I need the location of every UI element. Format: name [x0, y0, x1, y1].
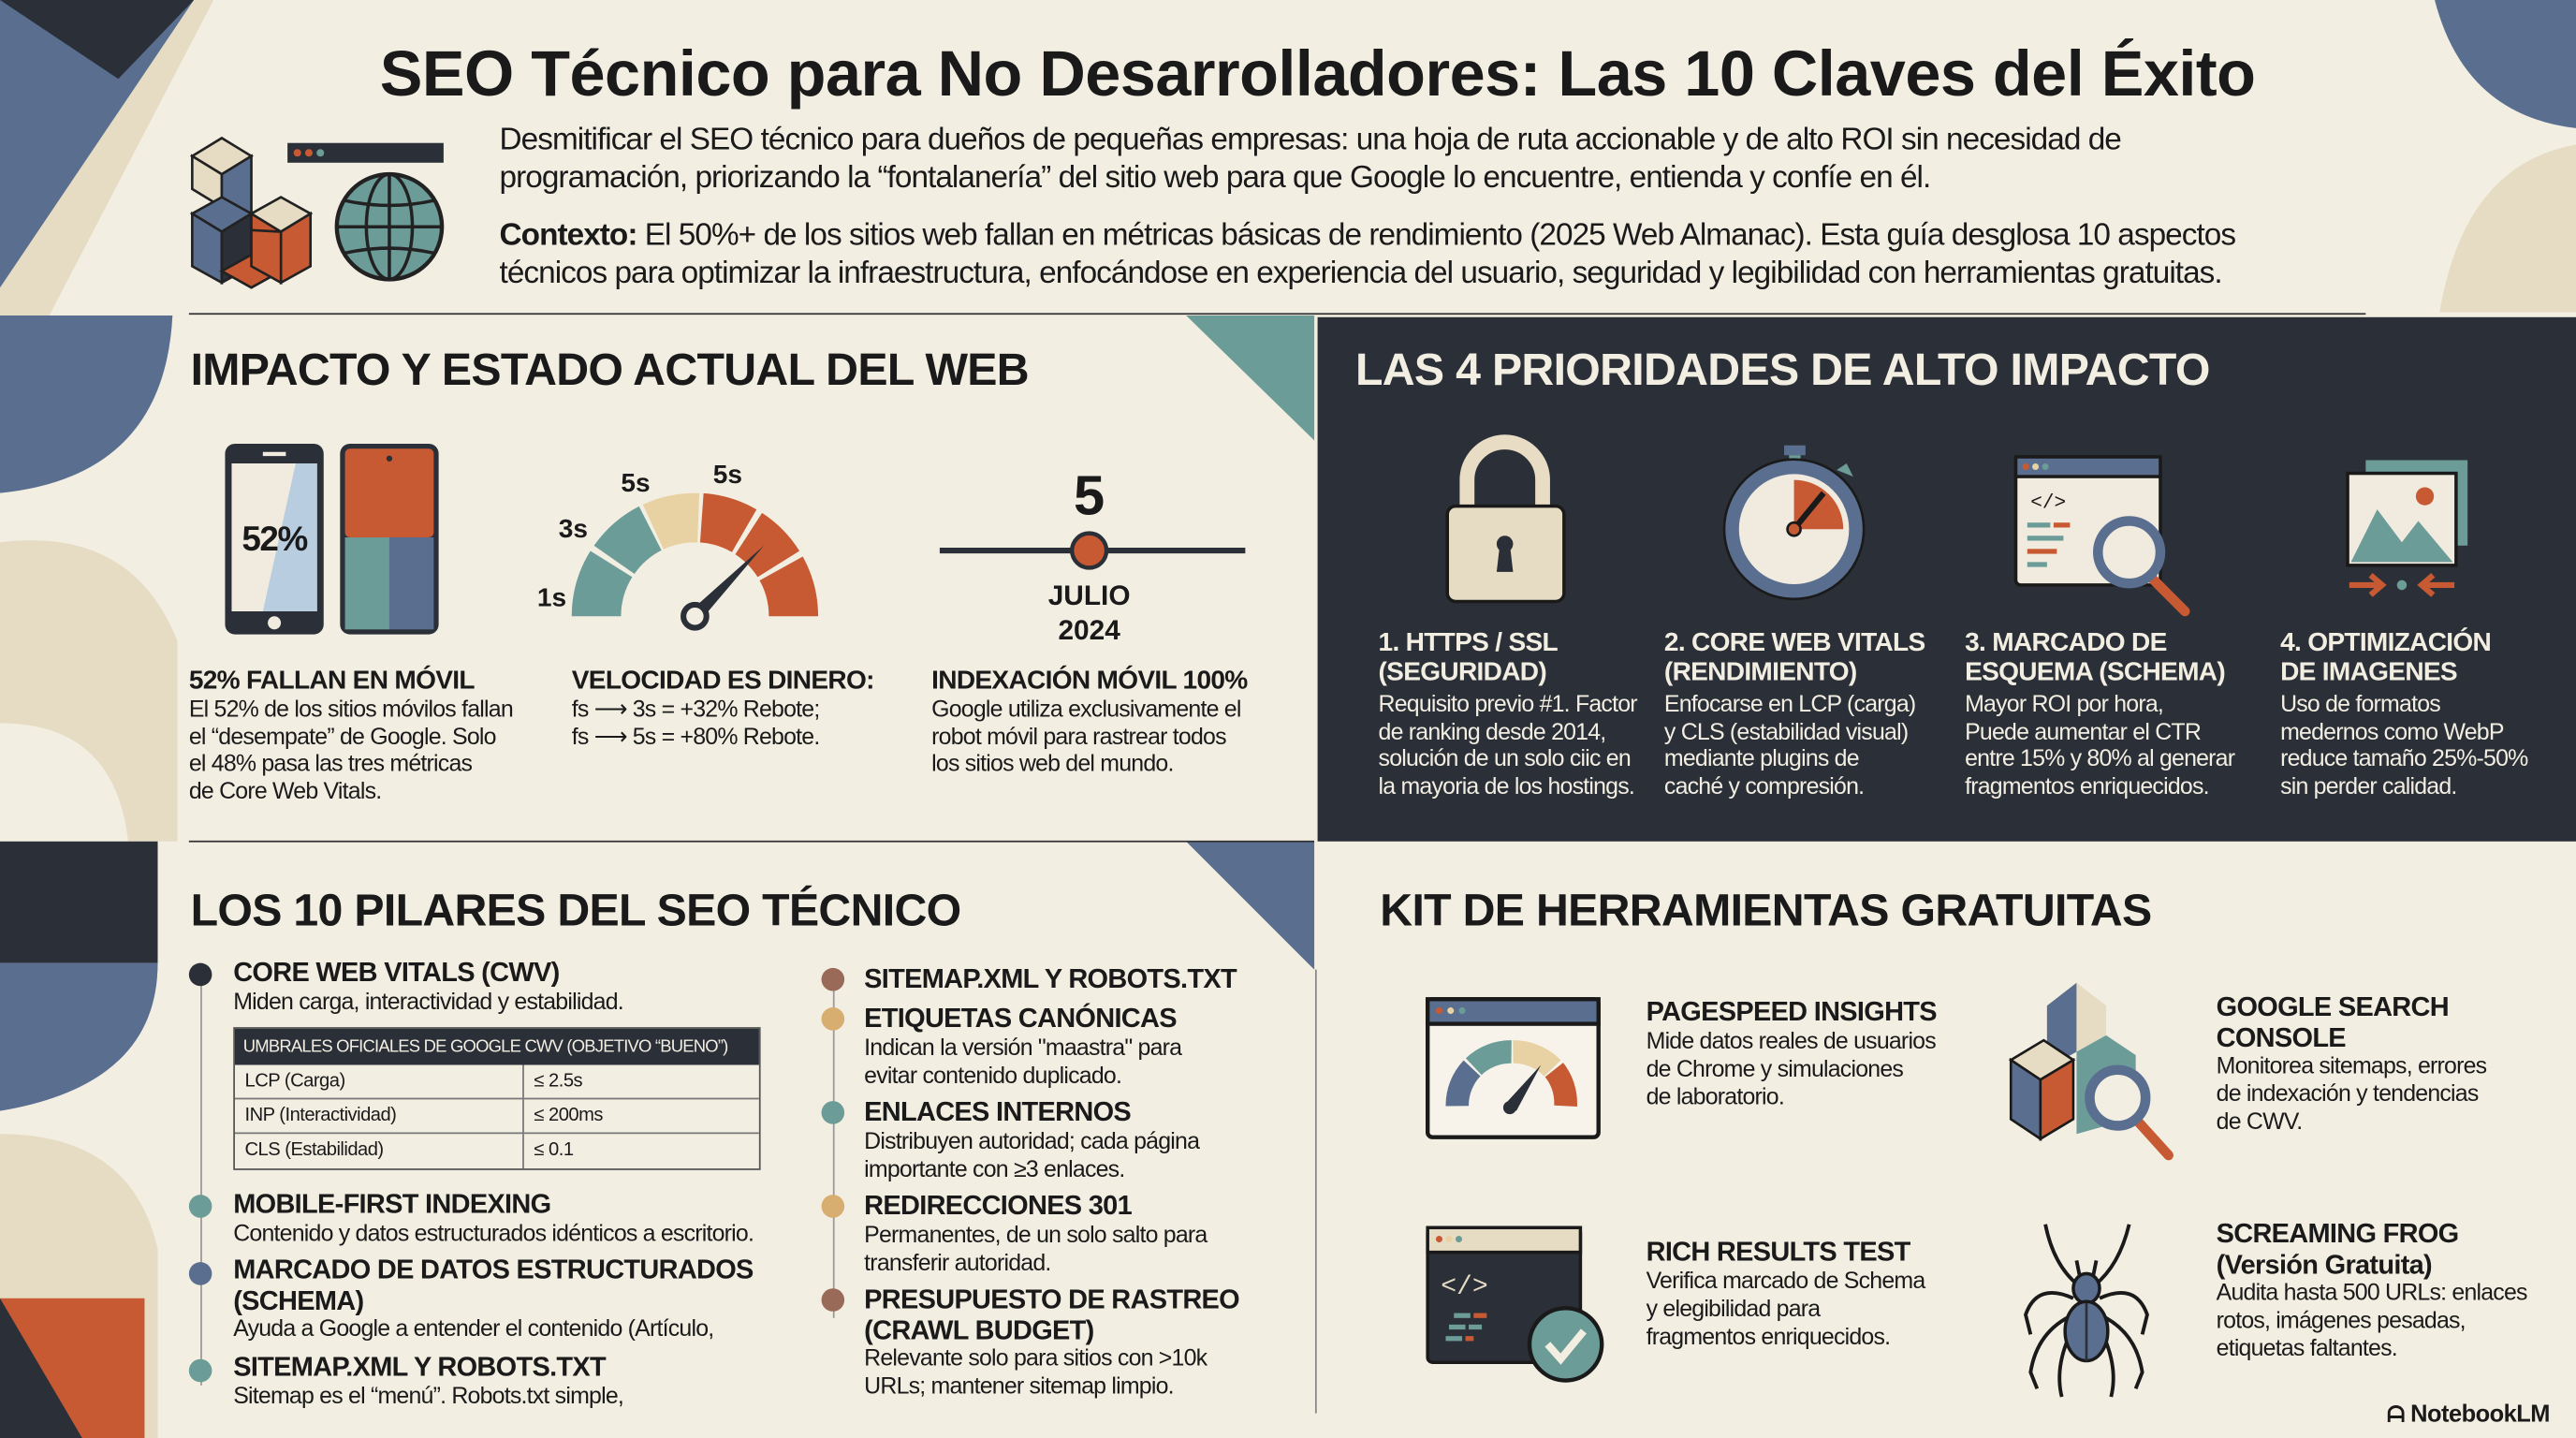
- text block: rich results: [1646, 1238, 1926, 1350]
- timeline: left column: MOBILE-FIRST INDEXING: [233, 1190, 550, 1220]
- timeline: right column: PRESUPUESTO DE RASTREO: [864, 1285, 1239, 1314]
- icon: cubes and globe: [189, 137, 444, 289]
- icon: phones: [225, 444, 439, 635]
- text block: schema: Mayor ROI por hora,: [1965, 692, 2163, 718]
- text block: schema: ESQUEMA (SCHEMA): [1965, 659, 2225, 687]
- text block: https: la mayoria de los hostings.: [1379, 773, 1634, 800]
- timeline: right column: evitar contenido duplicado.: [864, 1063, 1121, 1089]
- text block: imagenes: 4. OPTIMIZACIÓN: [2280, 629, 2491, 657]
- heading: pilares: LOS 10 PILARES DEL SEO TÉCNICO: [191, 884, 960, 935]
- text block: cwv: (RENDIMIENTO): [1664, 659, 1857, 687]
- text block: search console: de indexación y tendencias: [2217, 1081, 2479, 1108]
- chart: timeline julio 2024: 2024: [1058, 615, 1120, 646]
- timeline: left column: Contenido y datos estructurados idénticos a escritorio.: [233, 1220, 754, 1246]
- text block: velocidad: fs ⟶ 5s = +80% Rebote.: [572, 724, 819, 751]
- text block: screaming frog: [2217, 1220, 2527, 1362]
- timeline: left column: Ayuda a Google a entender el contenido (Artículo,: [233, 1316, 713, 1343]
- text block: screaming frog: (Versión Gratuita): [2217, 1250, 2432, 1280]
- timeline: left column: (SCHEMA): [233, 1286, 363, 1315]
- heading: prioridades: LAS 4 PRIORIDADES DE ALTO IMPACTO: [1355, 344, 2210, 394]
- text block: schema: fragmentos enriquecidos.: [1965, 773, 2209, 800]
- timeline: right column: Relevante solo para sitios con >10k: [864, 1346, 1207, 1372]
- subtitle: Desmitificar el SEO técnico para dueños de pequeñas empresas: una hoja de ruta accionable y de alto ROI sin necesidad de: [500, 124, 2121, 158]
- icon: phones: 52%: [242, 520, 308, 558]
- text block: 52% fallan: el 48% pasa las tres métricas: [189, 752, 472, 778]
- text block: imagenes: reduce tamaño 25%-50%: [2280, 746, 2527, 772]
- text block: https: de ranking desde 2014,: [1379, 719, 1605, 745]
- text block: rich results: RICH RESULTS TEST: [1647, 1238, 1910, 1267]
- text block: imagenes: medernos como WebP: [2280, 719, 2504, 745]
- text block: imagenes: DE IMAGENES: [2280, 659, 2457, 687]
- context paragraph: [500, 218, 2235, 291]
- timeline: left column: Miden carga, interactividad y estabilidad.: [233, 989, 623, 1015]
- text block: rich results: Verifica marcado de Schema: [1647, 1268, 1925, 1294]
- text block: 52% fallan: el “desempate” de Google. Solo: [189, 724, 496, 751]
- text block: pagespeed: PAGESPEED INSIGHTS: [1647, 998, 1937, 1027]
- text block: https: solución de un solo ciic en: [1379, 746, 1631, 772]
- table: cwv thresholds: ≤ 0.1: [534, 1140, 574, 1160]
- text block: cwv: caché y compresión.: [1664, 773, 1864, 800]
- icons: tools: </>: [1441, 1272, 1488, 1302]
- text block: schema: Puede aumentar el CTR: [1965, 719, 2201, 745]
- text block: pagespeed: Mide datos reales de usuarios: [1647, 1028, 1936, 1054]
- timeline: right column: ETIQUETAS CANÓNICAS: [864, 1005, 1177, 1034]
- timeline: right column: Distribuyen autoridad; cada página: [864, 1128, 1199, 1154]
- heading: impacto: IMPACTO Y ESTADO ACTUAL DEL WEB: [191, 344, 1029, 394]
- chart: speed gauge: [537, 461, 818, 631]
- timeline: right column: ENLACES INTERNOS: [864, 1098, 1131, 1127]
- text block: imagenes: Uso de formatos: [2280, 692, 2440, 718]
- text block: pagespeed: [1647, 998, 1937, 1110]
- icons: priorities: </>: [2030, 492, 2066, 514]
- text block: screaming frog: SCREAMING FROG: [2217, 1220, 2458, 1249]
- chart: speed gauge: 1s: [537, 583, 566, 612]
- table: cwv thresholds: LCP (Carga): [245, 1072, 345, 1092]
- text block: velocidad: [572, 668, 874, 751]
- text block: velocidad: fs ⟶ 3s = +32% Rebote;: [572, 697, 819, 723]
- timeline: left column: [189, 958, 761, 1409]
- chart: speed gauge: 5s: [713, 461, 742, 489]
- text block: screaming frog: Audita hasta 500 URLs: enlaces: [2217, 1280, 2527, 1307]
- text block: indexación: Google utiliza exclusivamente el: [931, 697, 1241, 723]
- text block: https: (SEGURIDAD): [1379, 659, 1546, 687]
- table: cwv thresholds: UMBRALES OFICIALES DE GOOGLE CWV (OBJETIVO “BUENO”): [243, 1037, 728, 1057]
- text block: search console: Monitorea sitemaps, errores: [2217, 1053, 2486, 1079]
- timeline: right column: Indican la versión "maastra" para: [864, 1034, 1181, 1061]
- text block: imagenes: [2280, 627, 2527, 800]
- title: SEO Técnico para No Desarrolladores: Las 10 Claves del Éxito: [380, 39, 2255, 110]
- table: cwv thresholds: [233, 1027, 761, 1170]
- text block: cwv: [1664, 629, 1925, 800]
- timeline: right column: transferir autoridad.: [864, 1250, 1051, 1276]
- text block: search console: CONSOLE: [2217, 1023, 2346, 1052]
- logo: NotebookLM: ᗩ NotebookLM: [2387, 1401, 2550, 1428]
- timeline: left column: MARCADO DE DATOS ESTRUCTURADOS: [233, 1255, 754, 1285]
- timeline: right column: (CRAWL BUDGET): [864, 1315, 1094, 1345]
- timeline: left column: SITEMAP.XML Y ROBOTS.TXT: [233, 1353, 606, 1382]
- text block: schema: entre 15% y 80% al generar: [1965, 746, 2234, 772]
- text block: https: [1379, 629, 1638, 800]
- context paragraph: técnicos para optimizar la infraestructura, enfocándose en experiencia del usuario, seguridad y legibilidad con herramientas gratuitas.: [500, 257, 2222, 291]
- text block: indexación: robot móvil para rastrear todos: [931, 724, 1226, 751]
- timeline: left column: Sitemap es el “menú”. Robots.txt simple,: [233, 1383, 623, 1409]
- panel: 10 pilares: [189, 884, 1239, 1409]
- text block: https: Requisito previo #1. Factor: [1379, 692, 1637, 718]
- text block: screaming frog: rotos, imágenes pesadas,: [2217, 1308, 2466, 1334]
- text block: imagenes: sin perder calidad.: [2280, 773, 2457, 800]
- text block: 52% fallan: El 52% de los sitios móvilos fallan: [189, 697, 513, 723]
- chart: timeline julio 2024: 5: [1074, 463, 1105, 526]
- text block: schema: [1965, 629, 2235, 800]
- text block: cwv: 2. CORE WEB VITALS: [1664, 629, 1925, 657]
- icons: tools: [1426, 983, 2174, 1397]
- text block: cwv: Enfocarse en LCP (carga): [1664, 692, 1915, 718]
- text block: https: 1. HTTPS / SSL: [1379, 629, 1558, 657]
- text block: indexación: los sitios web del mundo.: [931, 752, 1174, 778]
- text block: pagespeed: de Chrome y simulaciones: [1647, 1056, 1903, 1082]
- heading: herramientas: KIT DE HERRAMIENTAS GRATUITAS: [1380, 884, 2152, 935]
- panel: las 4 prioridades: [1318, 317, 2576, 842]
- table: cwv thresholds: CLS (Estabilidad): [245, 1140, 384, 1160]
- panel: kit de herramientas: [1380, 884, 2527, 1397]
- text block: velocidad: VELOCIDAD ES DINERO:: [572, 668, 874, 696]
- text block: rich results: fragmentos enriquecidos.: [1647, 1324, 1890, 1350]
- text block: indexación: INDEXACIÓN MÓVIL 100%: [931, 668, 1248, 696]
- text block: pagespeed: de laboratorio.: [1647, 1084, 1784, 1110]
- timeline: right column: SITEMAP.XML Y ROBOTS.TXT: [864, 964, 1237, 994]
- text block: 52% fallan: 52% FALLAN EN MÓVIL: [189, 668, 475, 696]
- timeline: right column: importante con ≥3 enlaces.: [864, 1156, 1124, 1182]
- text block: 52% fallan: [189, 665, 513, 805]
- subtitle: [500, 124, 2121, 196]
- table: cwv thresholds: ≤ 200ms: [534, 1106, 603, 1125]
- subtitle: programación, priorizando la “fontalanería” del sitio web para que Google lo encuentre, entienda y confíe en él.: [500, 161, 1930, 196]
- table: cwv thresholds: ≤ 2.5s: [534, 1072, 582, 1092]
- chart: timeline julio 2024: JULIO: [1048, 580, 1131, 611]
- timeline: right column: REDIRECCIONES 301: [864, 1192, 1132, 1221]
- chart: speed gauge: 5s: [621, 468, 651, 497]
- text block: search console: GOOGLE SEARCH: [2217, 992, 2449, 1022]
- text block: screaming frog: etiquetas faltantes.: [2217, 1336, 2397, 1362]
- timeline: right column: Permanentes, de un solo salto para: [864, 1222, 1207, 1248]
- chart: speed gauge: 3s: [559, 514, 588, 543]
- text block: cwv: mediante plugins de: [1664, 746, 1859, 772]
- icons: priorities: [1445, 434, 2467, 616]
- context paragraph: Contexto: El 50%+ de los sitios web fallan en métricas básicas de rendimiento (2025 Web Almanac). Esta guía desglosa 10 aspectos: [500, 218, 2235, 253]
- timeline: left column: CORE WEB VITALS (CWV): [233, 958, 560, 988]
- text block: search console: de CWV.: [2217, 1109, 2302, 1136]
- timeline: right column: URLs; mantener sitemap limpio.: [864, 1374, 1174, 1401]
- text block: 52% fallan: de Core Web Vitals.: [189, 779, 381, 805]
- timeline: right column: [822, 964, 1239, 1401]
- text block: rich results: y elegibilidad para: [1647, 1296, 1820, 1322]
- text block: indexación: [931, 665, 1248, 778]
- text block: search console: [2217, 992, 2486, 1136]
- panel: impacto y estado actual: [189, 344, 1248, 805]
- table: cwv thresholds: INP (Interactividad): [245, 1106, 396, 1125]
- text block: cwv: y CLS (estabilidad visual): [1664, 719, 1908, 745]
- chart: timeline julio 2024: [940, 463, 1245, 646]
- text block: schema: 3. MARCADO DE: [1965, 629, 2167, 657]
